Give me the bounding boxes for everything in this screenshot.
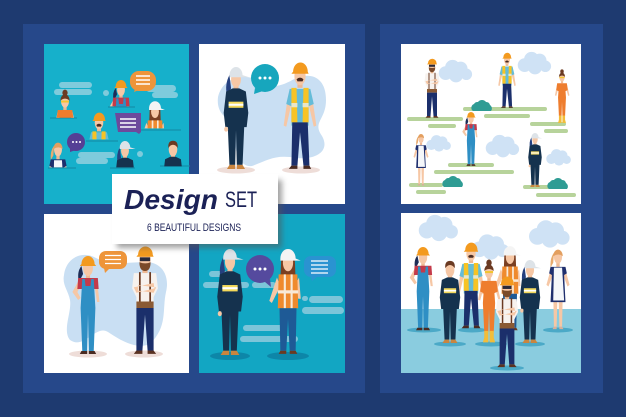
ground shadows — [217, 166, 320, 174]
panel: teal group of worker busts — [44, 44, 190, 221]
speech bubble purple rect — [115, 113, 141, 134]
title accent: SET — [225, 187, 257, 212]
orange overall worker — [555, 69, 569, 123]
panel: left backing — [23, 24, 365, 393]
blue overalls worker — [462, 112, 477, 166]
blond waitress — [49, 142, 67, 168]
overalls worker — [410, 247, 433, 330]
ground shadows — [69, 350, 163, 358]
speech bubble purple dots — [67, 133, 85, 152]
panel: crowd of workers — [401, 213, 581, 373]
worker coverall — [224, 67, 249, 169]
suspenders worker front — [496, 277, 518, 367]
speech bubble — [251, 64, 279, 94]
white hat coverall woman — [116, 141, 136, 168]
speech bubble — [99, 251, 127, 273]
clouds — [426, 52, 571, 166]
orange overall worker — [478, 260, 501, 342]
panel: right backing — [380, 24, 603, 393]
coverall worker — [528, 133, 542, 187]
blob — [218, 76, 326, 166]
coverall man — [440, 261, 460, 343]
orange hat man — [89, 112, 108, 140]
speech bubble orange — [130, 71, 156, 92]
blob — [64, 255, 167, 346]
man in coverall — [164, 140, 182, 166]
white hat woman — [144, 101, 165, 128]
panel: six workers on grass — [401, 44, 581, 204]
vest worker back — [495, 246, 520, 330]
hi-vis worker — [498, 53, 516, 108]
coverall woman — [520, 260, 541, 343]
title card — [112, 174, 282, 248]
floor shadows — [407, 328, 573, 370]
suspenders man — [132, 246, 158, 354]
suspenders worker — [424, 59, 440, 118]
clouds — [419, 215, 570, 260]
waitress — [414, 134, 428, 185]
coverall woman — [217, 249, 244, 355]
speech bubble purple — [246, 255, 274, 287]
orange hat woman — [110, 80, 130, 106]
bushes — [442, 100, 568, 189]
ground shadows — [210, 352, 309, 360]
panel: two workers on teal — [199, 214, 345, 373]
waitress — [546, 250, 570, 329]
title: Design — [124, 184, 218, 215]
overalls woman — [72, 256, 99, 354]
subtitle: 6 BEAUTIFUL DESIGNS — [147, 222, 241, 234]
bun woman — [56, 90, 74, 118]
panel: two workers on white — [199, 44, 345, 204]
worker hi-vis — [284, 62, 316, 169]
vest woman — [269, 249, 301, 354]
speech bubble blue — [304, 256, 336, 281]
panel: two workers on white, lower — [44, 214, 189, 373]
hi-vis worker back — [457, 243, 485, 328]
